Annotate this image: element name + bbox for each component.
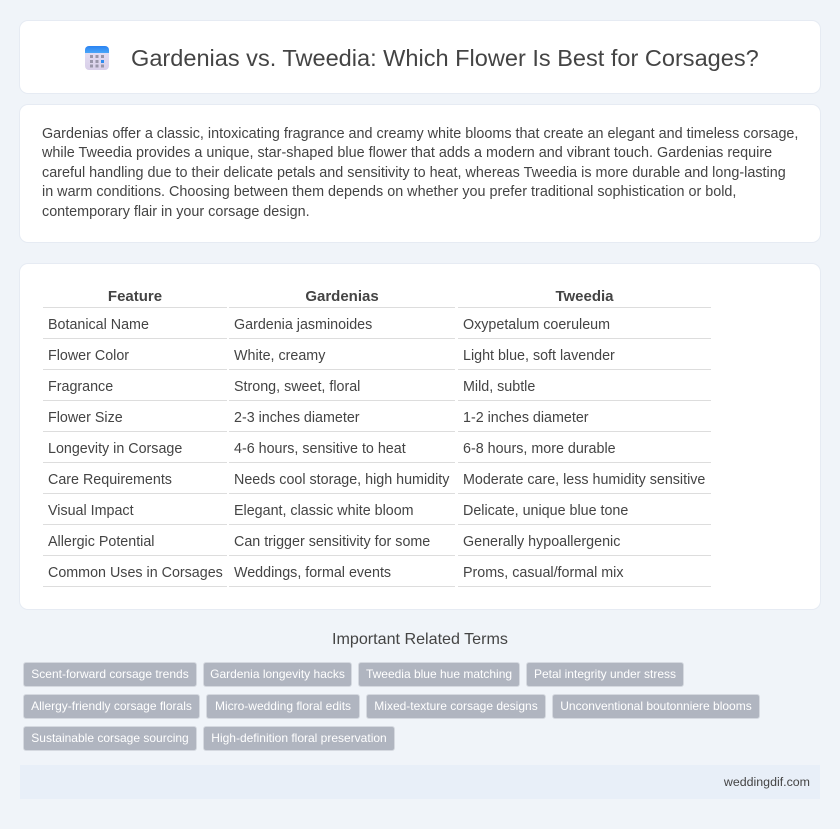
comparison table: Generally hypoallergenic (463, 534, 620, 550)
intro text: careful handling due to their delicate petals and sensitivity to heat, whereas Tweedia is more durable and long-lasting (42, 165, 786, 181)
related term tags: Tweedia blue hue matching (366, 667, 512, 681)
intro text: while Tweedia provides a unique, star-shaped blue flower that adds a modern and vibrant touch. Gardenias require (42, 145, 772, 161)
intro text: contemporary flair in your corsage design. (42, 204, 310, 220)
comparison table: Longevity in Corsage (48, 441, 182, 457)
comparison table: Proms, casual/formal mix (463, 565, 623, 581)
comparison table: 4-6 hours, sensitive to heat (234, 441, 406, 457)
related term tags: High-definition floral preservation (211, 731, 387, 745)
related term tags: Mixed-texture corsage designs (374, 699, 538, 713)
related term tags: Allergy-friendly corsage florals (31, 699, 192, 713)
footer bar (20, 765, 820, 799)
comparison table: Allergic Potential (48, 534, 154, 550)
panel: introduction (20, 105, 820, 242)
comparison table: Care Requirements (48, 472, 172, 488)
comparison table: Tweedia (555, 288, 614, 305)
related term tags: Gardenia longevity hacks (210, 667, 345, 681)
related term tags: Sustainable corsage sourcing (31, 731, 189, 745)
related term tags: Unconventional boutonniere blooms (560, 699, 752, 713)
title: Gardenias vs. Tweedia: Which Flower Is Best for Corsages? (131, 45, 759, 71)
icon: calendar (85, 46, 109, 70)
comparison table: Feature (108, 288, 162, 305)
comparison table: Elegant, classic white bloom (234, 503, 414, 519)
related term tags: Petal integrity under stress (534, 667, 676, 681)
comparison table: 6-8 hours, more durable (463, 441, 616, 457)
footer credit: weddingdif.com (724, 775, 810, 789)
comparison table: Botanical Name (48, 317, 149, 333)
comparison table: 2-3 inches diameter (234, 410, 360, 426)
comparison table: Light blue, soft lavender (463, 348, 615, 364)
comparison table: Strong, sweet, floral (234, 379, 360, 395)
related term tags: Scent-forward corsage trends (31, 667, 189, 681)
comparison table: Fragrance (48, 379, 113, 395)
comparison table: Flower Color (48, 348, 129, 364)
comparison table: Gardenia jasminoides (234, 317, 372, 333)
comparison table: Gardenias (305, 288, 379, 305)
heading: related terms: Important Related Terms (332, 630, 508, 648)
panel: comparison table (20, 264, 820, 609)
comparison table: 1-2 inches diameter (463, 410, 589, 426)
comparison table: Flower Size (48, 410, 123, 426)
comparison table: Mild, subtle (463, 379, 535, 395)
comparison table: White, creamy (234, 348, 325, 364)
comparison table: Can trigger sensitivity for some (234, 534, 430, 550)
comparison table: Visual Impact (48, 503, 134, 519)
comparison table: Oxypetalum coeruleum (463, 317, 610, 333)
intro text: in warm conditions. Choosing between them depends on whether you prefer traditional sophistication or bold, (42, 184, 736, 200)
header panel (20, 21, 820, 93)
comparison table: Common Uses in Corsages (48, 565, 223, 581)
intro text: Gardenias offer a classic, intoxicating fragrance and creamy white blooms that create an elegant and timeless corsage, (42, 126, 798, 142)
comparison table: Delicate, unique blue tone (463, 503, 628, 519)
comparison table: Weddings, formal events (234, 565, 391, 581)
comparison table (43, 288, 711, 587)
intro text (42, 126, 798, 220)
comparison table: Moderate care, less humidity sensitive (463, 472, 705, 488)
related term tags (23, 662, 760, 751)
related term tags: Micro-wedding floral edits (215, 699, 351, 713)
comparison table: Needs cool storage, high humidity (234, 472, 449, 488)
